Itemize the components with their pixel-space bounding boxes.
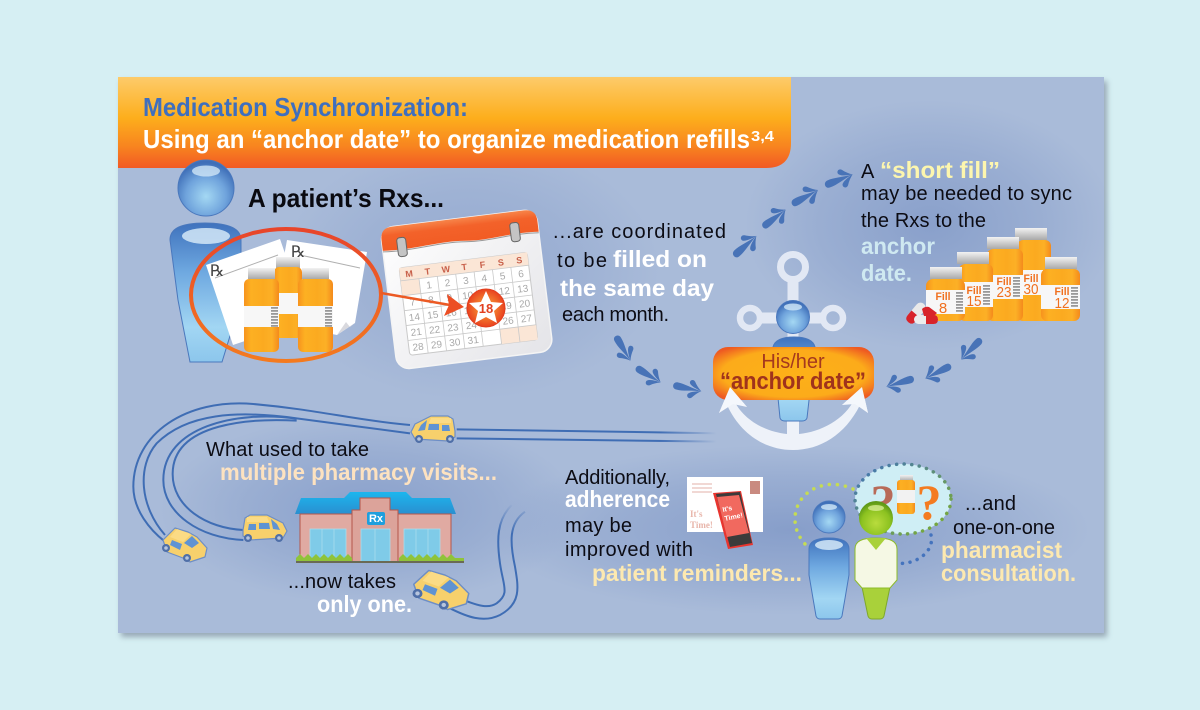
text: short fill: the Rxs to the [861,210,986,232]
calendar grid: 14 [408,312,421,324]
calendar grid: 8 [428,295,435,307]
text: pharmacist consultation: ...and [965,493,1016,515]
calendar grid: 9 [446,293,453,304]
calendar grid: T [461,262,468,272]
calendar grid: M [405,268,413,279]
smartphone: Time! [724,512,744,523]
calendar grid: 13 [517,283,529,296]
text: patient reminders: adherence [565,486,670,512]
calendar grid: 30 [449,337,462,349]
bottle fill 30: Fill [1024,273,1038,285]
text: multiple pharmacy visits [206,439,497,485]
calendar grid: 28 [412,342,425,354]
calendar grid: 1 [426,280,433,292]
text: are coordinated [553,221,726,326]
bottle fill 12: Fill [1054,286,1070,298]
arrow from ring to date [381,293,464,316]
patient figure [170,160,241,362]
calendar grid: 10 [462,290,474,302]
text: patient reminders: Additionally, [565,467,670,489]
text: short fill: “short fill” [880,157,1000,183]
reminder mail card: It's [690,509,703,519]
text: multiple pharmacy visits: What used to take [206,439,369,461]
arrows up to short fill [727,166,856,263]
left bottle [244,268,279,352]
main panel [118,77,1104,633]
date badge 18: 18 [479,301,493,316]
bottle fill 15: Fill [966,285,982,297]
text: pharmacist consultation [941,493,1076,586]
text: patient reminders: improved with [565,539,693,561]
prescriptions and bottles in ring [191,229,381,361]
reminder mail card [687,477,763,532]
header banner [118,77,791,168]
short-fill bottles [904,228,1080,325]
text: short fill: date. [861,260,912,286]
bottle fill 23: 23 [996,284,1012,301]
text: short fill: may be needed to sync [861,183,1072,205]
calendar grid: T [424,266,431,277]
prescription paper left [206,239,308,345]
text: pharmacist consultation: pharmacist [941,537,1062,563]
text: short fill [861,157,1072,286]
anchor [713,254,874,450]
consultation dotted link [795,484,932,563]
car top [411,416,455,443]
calendar grid: 24 [465,320,478,332]
anchor arrow tips [719,387,868,413]
bottle fill 12: 12 [1054,295,1070,312]
reference superscript: 3,4 [751,128,775,145]
text: now takes only one [288,571,412,617]
speech bubble: ? [916,474,942,530]
shrubs [296,554,464,563]
bottle fill 8: 8 [939,300,947,317]
calendar grid: 7 [409,297,417,309]
bottle fill 8 [926,267,965,321]
windows and door [310,529,440,562]
calendar grid: 11 [480,288,492,300]
anchor figure head [776,300,810,334]
prescription paper right [272,240,367,335]
right bottle [298,268,333,352]
anchor date box [713,347,874,400]
smartphone [713,491,753,549]
bottle fill 8: Fill [936,291,950,303]
text: are coordinated: filled on [613,246,707,272]
calendar grid: 6 [518,269,525,280]
walls [300,514,451,562]
car tracks [133,403,720,619]
bottle fill 15 [957,252,993,321]
car middle [243,515,287,542]
patient figure small [809,501,849,619]
prescription paper right: ℞ [291,242,305,261]
bubble bottle [897,475,915,514]
text: pharmacist consultation: one-on-one [953,517,1055,539]
anchor figure body [773,337,815,421]
text: are coordinated: ...are coordinated [553,221,726,243]
calendar grid: 12 [498,286,511,298]
calendar grid: 3 [463,276,470,287]
calendar grid: 26 [502,315,515,328]
rx sign: Rx [369,513,384,525]
calendar grid: 2 [444,278,451,290]
prescription paper left: ℞ [210,261,224,280]
text: patient reminders: may be [565,515,632,537]
calendar grid [399,252,538,355]
car lower right [412,570,469,610]
anchor date box: His/her [761,351,825,373]
text: now takes only one: only one. [317,591,412,617]
bottle fill 23: Fill [996,276,1012,288]
calendar grid: 20 [519,298,531,311]
calendar [380,209,553,370]
calendar grid: 22 [429,324,441,337]
speech bubble [855,464,951,534]
text: are coordinated: each month. [562,304,669,326]
title line 1: Medication Synchronization: [143,92,468,122]
calendar grid: 25 [484,318,496,330]
calendar grid: 27 [520,313,533,325]
text: patient reminders: patient reminders... [592,560,802,586]
date badge 18 [467,289,505,327]
title line 2: Using an “anchor date” to organize medication refills [143,124,750,154]
calendar grid: 18 [482,303,495,315]
bottle fill 30: 30 [1024,281,1038,298]
speech bubble: ? [870,474,896,530]
text: multiple pharmacy visits: multiple pharmacy visits... [220,459,497,485]
calendar grid: 16 [445,307,458,320]
calendar grid: S [516,255,523,266]
heading: a patient's Rxs: A patient’s Rxs... [248,183,444,213]
text: short fill: A [861,161,875,183]
calendar grid: W [441,264,451,275]
calendar grid: 19 [500,301,513,313]
text: patient reminders [565,467,802,586]
calendar grid: 29 [430,339,443,352]
bottle fill 15: 15 [966,293,982,310]
text: now takes only one: ...now takes [288,571,396,593]
calendar grid: 31 [467,335,480,347]
text: are coordinated: the same day [560,275,714,301]
text: are coordinated: to be [557,250,607,272]
roof [295,492,456,514]
bottle fill 23 [987,237,1023,321]
middle bottle [274,257,302,338]
car lower left [162,528,207,562]
calendar grid: 5 [499,271,507,283]
pharmacy building [295,492,464,563]
calendar grid: F [479,259,486,270]
pills [904,301,938,325]
arrows from bottles to anchor [884,332,988,396]
text: short fill: anchor [861,233,935,259]
soft background glows [160,100,1115,615]
anchor date box: “anchor date” [720,368,866,395]
calendar grid: S [497,257,505,268]
calendar grid: 15 [427,310,440,322]
calendar grid: 4 [481,273,488,285]
arrows to anchor from left [608,331,703,400]
orange ring [191,229,381,361]
smartphone: It's [722,505,733,514]
panel shadow [121,81,1107,637]
calendar grid: 23 [447,322,460,335]
text: pharmacist consultation: consultation. [941,560,1076,586]
reminder mail card: Time! [690,520,713,530]
bottle fill 12 [1041,257,1080,321]
bottle fill 30 [1015,228,1051,321]
pharmacist figure [855,501,897,619]
calendar grid: 17 [463,305,476,317]
calendar grid: 21 [410,327,423,339]
